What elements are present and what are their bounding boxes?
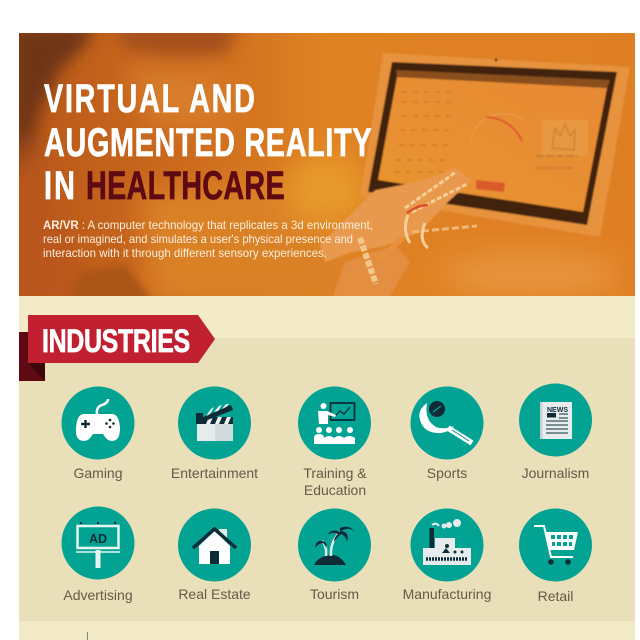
item: retail: Retail (538, 588, 573, 604)
item: advertising: AD (89, 532, 107, 546)
title: HEALTHCARE (86, 163, 285, 208)
screen: data table (395, 92, 452, 172)
item: retail (519, 508, 592, 604)
description text (43, 218, 373, 260)
screen: hand chart (542, 120, 588, 156)
photo: tablet with screen (360, 53, 630, 237)
title: VIRTUAL AND (44, 76, 255, 121)
title: IN (44, 163, 75, 208)
item: entertainment (171, 386, 258, 481)
section ribbon: INDUSTRIES (42, 324, 190, 360)
item: training and education: Training & (303, 465, 367, 481)
item: manufacturing (403, 508, 491, 602)
title: AUGMENTED REALITY (44, 120, 372, 165)
item: journalism: Journalism (522, 465, 589, 481)
item: gaming: Gaming (73, 465, 123, 481)
item: training and education: Education (304, 482, 366, 498)
item: journalism: NEWS (547, 405, 568, 414)
section ribbon (19, 315, 215, 381)
cut-off divider line (87, 632, 88, 640)
item: real estate: Real Estate (178, 586, 251, 602)
item: real estate (178, 508, 251, 602)
item: tourism (298, 508, 371, 602)
item: advertising: Advertising (63, 587, 133, 603)
item: gaming (62, 386, 134, 481)
item: sports (410, 386, 484, 481)
panel: industries (19, 315, 635, 621)
item: manufacturing: Manufacturing (403, 586, 491, 602)
description text: interaction with it through different sensory experiences. (43, 246, 327, 260)
screen: gauge dial (470, 114, 523, 142)
screen: red button (476, 180, 505, 192)
item: training and education (298, 386, 371, 498)
hero banner (10, 25, 635, 305)
page background (19, 296, 635, 640)
description text: real or imagined, and simulates a user's physical presence and (43, 232, 353, 246)
item: journalism (519, 384, 592, 481)
item: advertising (62, 506, 134, 603)
title (44, 76, 372, 208)
photo: people background (10, 25, 620, 305)
item: sports: Sports (427, 465, 467, 481)
description text: AR/VR : A computer technology that replicates a 3d environment, (43, 218, 373, 232)
item: tourism: Tourism (310, 586, 359, 602)
photo: hand with exoskeleton (320, 168, 477, 305)
item: entertainment: Entertainment (171, 465, 258, 481)
